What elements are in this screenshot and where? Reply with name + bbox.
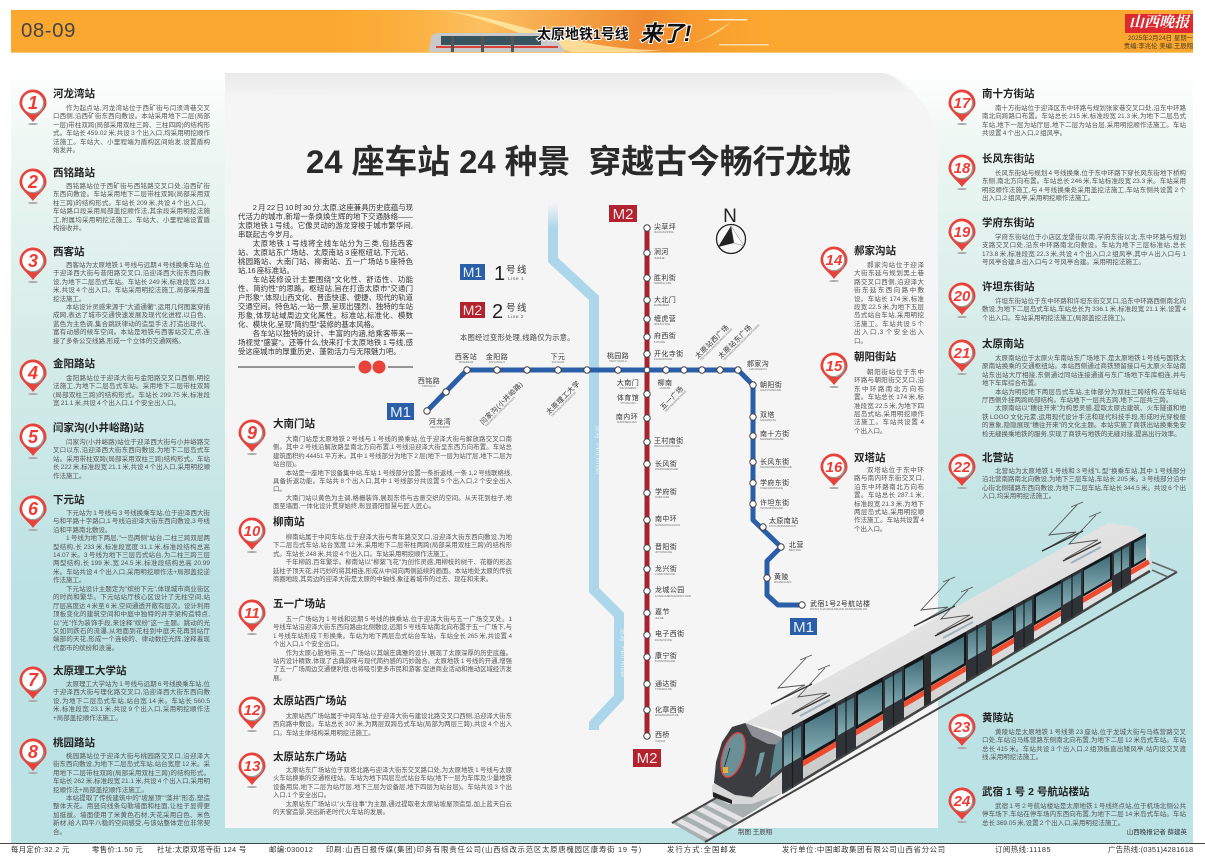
station name: 西铭路站 — [53, 167, 95, 179]
icon: pin 12: 12 — [244, 702, 261, 719]
train cab — [712, 723, 782, 804]
station text: 太原理工大学站为 1 号线与远期 6 号线换乘车站,位于迎泽西大街与理化路交叉口,沿迎泽西大街东西向敷设,为地下二层岛式车站,站台宽 14 米。车站长 560.5 米,标准段宽 23.1 米,共设 9 个出入口,采用明挖顺作法+局部盖挖顺作法施工。 — [53, 681, 210, 722]
line 1 station labels: 南十方街 — [760, 429, 790, 438]
station name: 柳南站 — [273, 516, 304, 528]
line 1 station labels: 武宿1号2号航站楼 — [810, 599, 870, 608]
icon: pin 21: 21 — [953, 345, 970, 362]
line 2 station labels: KAIHUASIJIE — [654, 357, 672, 361]
station text: 1 号线为地下两层,"一岛两侧"站台,二柱三跨双层两型结构,长 233 米,标准段宽度 31.1 米,标准段结构总高 14.07 米。3 号线为地下三层岛式站台,为二柱三跨三层两型结构,长 199 米,宽 24.5 米,标准段结构总高 20.99 米。车站共设 4 个出入口,采用明挖顺作法+局部盖挖逆作法施工。 — [53, 535, 210, 584]
icon: pin 3 — [20, 248, 46, 283]
map legend: 2 — [492, 301, 503, 323]
map legend — [460, 263, 528, 323]
icon: north compass: N — [723, 206, 737, 227]
line 2 station labels: 王村南街 — [654, 436, 684, 445]
station text: 本站为明挖地下两层岛式车站,主体部分为双柱三跨结构,在车站站厅西侧外挂两跨局部结构。车站地下一层共五跨,地下二层共三跨。 — [982, 388, 1186, 404]
station 24 — [948, 786, 1186, 828]
icon: pin 13: 13 — [244, 758, 261, 775]
station name: 朝阳街站 — [854, 351, 896, 363]
icon: pin 21 — [948, 339, 976, 376]
line 1 station labels: HUANGLING — [774, 580, 792, 584]
line 1 station labels: 下元 — [551, 353, 565, 361]
station text: 柳南站属于中间车站,位于迎泽大街与青年路交叉口,沿迎泽大街东西向敷设,为地下二层岛式车站,站台宽度 12 米,采用地下二层带柱两跨(局部采用双柱三跨)的结构形式。车站长 248 米,共设 4 个出入口。车站采用明挖顺作法施工。 — [273, 534, 512, 558]
line 1 station labels: 河龙湾 — [429, 417, 451, 426]
line 2 station labels: LONGCHENGGONGYUAN — [655, 594, 691, 598]
icon: pin 15: 15 — [826, 358, 843, 375]
line 1 station labels: HELONGWAN — [430, 425, 450, 429]
station text: 千年柳韵,百年繁华。柳南站以"柳絮飞花"为创作灵感,用柳枝的树干、花瓣的形态延柱子顶天花,并巧妙的将其相连,形成从中间向两侧延续的画面。本站地处太原的传统商圈地段,其旁边的迎泽大街是太原的中轴线,象征着城市的过去、现在和未来。 — [273, 559, 512, 583]
rotated station labels — [478, 323, 761, 428]
station name: 太原站西广场站 — [273, 695, 346, 707]
line 2 station labels: CHANGFENGJIE — [655, 467, 678, 471]
banner slogan — [537, 21, 691, 46]
icon: pin 7 — [20, 666, 46, 702]
line badges — [387, 205, 817, 767]
line 1 station labels: BEIYING — [789, 548, 801, 552]
line 2 station labels: JINYANGJIE — [655, 550, 672, 554]
line 2 station labels: 通达街 — [655, 679, 677, 688]
line 2 station labels: 化章西街 — [655, 705, 685, 714]
icon: pin 20: 20 — [953, 288, 971, 305]
icon: pin 6: 6 — [28, 499, 39, 519]
station name: 太原站东广场站 — [273, 751, 346, 763]
map legend: 号线 — [506, 264, 528, 276]
line 1 station labels: SHUANGTA — [760, 418, 776, 422]
line 1 station labels: 学府东街 — [760, 478, 790, 487]
station text: 学府东街站位于小店区龙堡街以南,学府东街以北,东中环路与规划支路交叉口处,沿东中环路南北向敷设。车站为地下三层标准站,总长 173.8 米,标准段宽 22.3 米,共设 4 个出入口,2 组风亭,其中 A 出入口与 1 号风亭合建,B 出入口与 2 号风亭合建。采用明挖法施工。 — [982, 234, 1186, 266]
icon: pin 11: 11 — [244, 605, 260, 622]
station text: 大南门站以黄色为主调,格栅装饰,展现东伟与古意交织的空间。从天花到柱子,地面至墙面,一体化设计贯穿始终,彰显晋阳智慧与匠人匠心。 — [273, 495, 512, 510]
station 10 — [238, 516, 512, 583]
rotated station labels: TAIYUANZHANXIGUANGCHANG — [699, 327, 733, 362]
station text — [273, 436, 512, 510]
map legend: 号线 — [506, 302, 528, 314]
line 2 station labels: 大北门 — [654, 295, 676, 304]
icon: pin 7: 7 — [28, 670, 39, 690]
divider with two red dots — [238, 360, 413, 374]
line 2 station labels: TIYUGUAN — [620, 401, 636, 405]
pantographs — [771, 502, 1101, 716]
station name: 太原理工大学站 — [53, 665, 126, 677]
page number: 08-09 — [21, 19, 76, 42]
station name: 学府东街站 — [982, 217, 1034, 229]
line badges: M2 — [613, 206, 633, 223]
rotated station labels: 五一广场 — [658, 384, 685, 411]
line badges: M2 — [637, 750, 657, 767]
line 2 station labels: 龙城公园 — [655, 585, 685, 594]
station 6 — [20, 494, 210, 652]
line 1 station labels: 西铭路 — [418, 376, 440, 385]
credit: reporter: 山西晚报记者 薛建英 — [1127, 829, 1187, 836]
line 2 station labels: DABEIMEN — [654, 303, 669, 307]
rotated station labels: TAIYUANLIGONGDAXUE — [550, 391, 577, 418]
station text: 大南门站是太原地铁 2 号线与 1 号线的换乘站,位于迎泽大街与解放路交叉口南侧。其中 2 号线沿解放路呈南北方向布置,1 号线沿迎泽大街呈东西方向布置。车站总建筑面积约 44451 平方米。其中 1 号线部分为地下 2 层(地下一层为站厅层,地下二层为站台层)。 — [273, 436, 512, 468]
icon: pin 5: 5 — [28, 427, 39, 447]
station name: 南十方街站 — [982, 88, 1034, 100]
line 2 stations — [644, 225, 650, 739]
station 21 — [948, 338, 1186, 439]
line 2 — [644, 228, 650, 736]
footer: 广告热线:(0351)4281618 — [1108, 845, 1193, 854]
station 1 — [20, 88, 210, 154]
icon: pin 12 — [238, 696, 266, 732]
footer: 订阅热线:11185 — [995, 845, 1051, 854]
line 1 station labels: NANSHIFANGJIE — [760, 437, 784, 441]
station 14 — [820, 245, 924, 346]
credit: chart: 制图 王辰翔 — [738, 829, 772, 836]
line 2 station labels: 康宁街 — [655, 651, 677, 660]
station name: 北营站 — [982, 452, 1014, 464]
line 1 station labels: 桃园路 — [607, 351, 629, 360]
line 2 station labels: 电子西街 — [655, 629, 685, 638]
line 1 station labels — [418, 351, 870, 611]
rotated station labels: WUYIGUANGCHANG — [664, 389, 687, 413]
line 2 station labels: 学府街 — [655, 487, 677, 496]
line 2 station labels: 涧河 — [654, 248, 669, 256]
rotated station labels: 闫家沟(小井峪路) — [478, 380, 525, 426]
icon: pin 14 — [820, 246, 848, 283]
line 2 station labels: 龙兴街 — [655, 564, 677, 573]
icon: pin 23: 23 — [953, 719, 971, 736]
banner slogan: 太原地铁1号线 — [537, 26, 629, 42]
line 2 station labels — [616, 222, 691, 743]
newspaper logo: 山西晚报 — [1129, 15, 1189, 31]
river: Fen River: 汾河 Fen River — [594, 425, 603, 475]
icon: pin 9: 9 — [247, 423, 257, 443]
icon: pin 15 — [820, 352, 848, 389]
icon: pin 23 — [948, 713, 976, 750]
station 5 — [20, 422, 210, 480]
station text: 黄陵站是太原地铁 1 号线第 23 座站,位于龙城大街与马练营路交叉口处,车站沿马练营路东侧南北向布置,为地下二层 12 米岛式车站。车站总长 415 米。车站共设 3 个出入口,2 组顶板直出矮风亭,站内设交叉渡线,采用明挖法施工。 — [982, 729, 1186, 761]
icon: pin 24 — [948, 787, 976, 824]
station text — [982, 355, 1186, 439]
station 15 — [820, 351, 924, 436]
station name: 河龙湾站 — [53, 88, 95, 100]
line 2 station labels: WANGCUNNANJIE — [654, 444, 680, 448]
footer: 印刷:山西日报传媒(集团)印务有限责任公司(山西综改示范区太原唐槐园区康寿街 19 号) — [326, 845, 642, 854]
rotated station labels: YANJIAGOU (XIAOJINGYULU) — [484, 396, 516, 428]
icon: pin 3: 3 — [28, 251, 38, 271]
header banner artwork — [380, 10, 769, 52]
station name: 大南门站 — [273, 418, 315, 430]
line 2 station labels: SHENGLIJIE — [654, 281, 671, 285]
station 2 — [20, 167, 210, 232]
line 2 station labels: 西桥 — [655, 730, 670, 739]
icon: pin 8: 8 — [28, 742, 38, 762]
station text: 朝阳街站位于东中环路与朝阳街交叉口,沿东中环路南北方向布置。车站总长 174 米,标准段宽 22.5 米,为地下四层岛式站,采用明挖顺作法施工。车站共设置 4 个出入口。 — [854, 369, 924, 435]
line 2 station labels: 长风街 — [655, 459, 677, 468]
station text: 五一广场站为 1 号线和远期 5 号线的换乘站,位于迎泽大街与五一广场交叉处。1 号线车站沿迎泽大街东西向路由北侧敷设,远期 5 号线车站南北向布置于五一广场下,与 1 号线车站形成 T 形换乘。车站为地下两层岛式站台车站。车站全长 265 米,共设置 4 个出入口,1 个安全出口。 — [273, 616, 512, 648]
station text — [273, 534, 512, 583]
line 2 station labels: 胜利街 — [654, 273, 676, 282]
station name: 长风东街站 — [982, 153, 1034, 165]
header band — [11, 10, 1193, 53]
line 2 station labels: 南内环 — [616, 412, 638, 421]
icon: pin 22 — [948, 453, 976, 490]
station text: 作为起点站,河龙湾站位于西矿街与闫须湾巷交叉口西侧,沿西矿街东西向敷设。本站采用地下二层(局部一层)带柱双跨(局部采用双柱三跨、三柱四跨)的结构形式。车站长 459.02 米,共设 3 个出入口,均采用明挖顺作法施工。车站大、小里程端为盾构区间始发,设置盾构始发井。 — [53, 105, 210, 154]
icon: pin 9 — [238, 420, 266, 455]
station 16 — [820, 452, 924, 534]
line 1 station labels: TAIYUANNANZHAN — [769, 524, 796, 528]
map legend: M2 — [463, 302, 482, 318]
line 2 station labels: HUAZHANGXIJIE — [655, 713, 679, 717]
icon: pin 8 — [20, 738, 46, 774]
map note: 本图经过变形处理,线路仅为示意。 — [460, 333, 575, 342]
line 1 station labels: 太原南站 — [769, 516, 799, 525]
line 1 station labels: 许坦东街 — [760, 498, 790, 507]
station text: 西铭路站位于西矿街与西铭路交叉口处,沿西矿街东西向敷设。车站采用地下二层带柱双跨(局部采用双柱三跨)的结构形式。车站长 209 米,共设 4 个出入口。车站路口段采用局部盖挖顺作法,其余段采用明挖法施工,附属均采用明挖法施工。车站大、小里程端设置盾构接收井。 — [53, 183, 210, 232]
station text: 北营站为太原地铁 1 号线和 3 号线"L 型"换乘车站,其中 1 号线部分沿北营南路南北向敷设,为地下三层车站,车站长 205 米。3 号线部分沿中心街北侧辅路东西向敷设,为地下二层车站,车站长 344.5 米。共设 6 个出入口,均采用明挖法施工。 — [982, 468, 1186, 500]
station 11 — [238, 598, 512, 682]
station text: 闫家沟(小井峪路)站位于迎泽西大街与小井峪路交叉口以东,沿迎泽西大街东西向敷设,为地下二层岛式车站。采用带柱双跨(局部采用双柱三跨)结构形式。车站长 222 米,标准段宽 21.1 米,共设 4 个出入口,采用明挖顺作法施工。 — [53, 439, 210, 480]
map legend: 1 — [494, 263, 505, 285]
map legend: Line 2 — [508, 314, 524, 320]
line 2 station labels: DIANZIXIJIE — [655, 638, 672, 642]
line 2 station labels: KANGNINGJIE — [655, 659, 675, 663]
station name: 五一广场站 — [273, 598, 326, 610]
station 20 — [948, 281, 1186, 323]
station text: 太原站东广场站以"火车往事"为主题,通过提取老太原站坡屋顶造型,加上蓝天白云的天窗造景,突出新老时代火车站的发展。 — [273, 800, 512, 816]
line 1 station labels: CHANGFENGDONGJIE — [760, 465, 792, 469]
station name: 太原南站 — [982, 338, 1024, 350]
line 2 station labels: LONGXINGJIE — [655, 572, 675, 576]
intro text: 太原地铁 1 号线将全线车站分为三类,包括西客站、太原站东广场站、太原南站 3 座枢纽站,下元站、桃园路站、大南门站、柳南站、五一广场站 5 座特色站,16 座标准站。 — [238, 239, 413, 275]
station 4 — [20, 358, 210, 407]
station 3 — [20, 246, 210, 345]
station text: 太原站东广场站位于双塔北路与迎泽大街东交叉路口处,为太原地铁 1 号线与太原火车站换乘的交通枢纽站。车站为地下四层岛式站台车站(地下一层为车库及少量地铁设备用房,地下二层为站厅层,地下三层为设备层,地下四层为站台层)。车站共设 3 个出入口,1 个安全出口。 — [273, 767, 512, 799]
rotated station labels: 太原站西广场 — [693, 323, 731, 360]
line 1 station labels: XIMINGLU — [422, 384, 436, 388]
line 1 station labels: XIAYUAN — [552, 360, 564, 364]
station text — [273, 767, 512, 817]
line 2 station labels: 尖草坪 — [654, 222, 676, 231]
icon: pin 6 — [20, 496, 46, 531]
line 2 station labels: FUXIJIE — [654, 340, 665, 344]
station text — [53, 262, 210, 345]
station name: 郝家沟站 — [854, 245, 896, 257]
line 2 station labels: JIANHE — [654, 256, 665, 260]
station text: 本站提取了传统建筑中的"坡屋顶""藻井"形态,塑造整体天花。用竖向线条勾勒墙面和柱面,让柱子显得更加挺拔。墙面使用了米黄色石材,天花采用白色、米色新材,给人四平八稳的空间感受,与该站整体定位非常契合。 — [53, 795, 210, 836]
station 9 — [238, 418, 512, 510]
line 2 station labels: XUEFUJIE — [655, 495, 669, 499]
footer: 社址:太原双塔寺街 124 号 — [157, 845, 247, 854]
station text: 太原南站位于太原火车南站东广场地下,是太原地铁 1 号线与国铁太原南站换乘的交通枢纽站。本站西侧通过商铁预留接口与太原火车站南站东出站大厅相接,东侧通过同站连接通道与东广场地下车库相连,并与地下车库综合布置。 — [982, 355, 1186, 387]
line 2 station labels: 府西街 — [654, 331, 676, 340]
station name: 许坦东街站 — [982, 281, 1034, 293]
station text: 太原站西广场站属于中间车站,位于迎泽大街与建设北路交叉口西侧,沿迎泽大街东西向路中敷设。车站总长 307 米,为两层双跨岛式车站(局部为两层三跨),共设 4 个出入口。车站主体结构采用明挖法施工。 — [273, 713, 512, 737]
station text: 长风东街站与规划 4 号线换乘,位于东中环路下穿长风东街地下桥构东侧,南北方向布置。车站总长 246 米,车站标准段宽 23.3 米。车站采用明挖顺作法施工,与 4 号线换乘处采用盖挖法施工,车站东侧共设置 2 个出入口,2 组风亭,采用明挖顺作法施工。 — [982, 170, 1186, 202]
station 7 — [20, 665, 210, 722]
line 2 station labels: 体育馆 — [617, 393, 639, 402]
station name: 桃园路站 — [53, 737, 95, 749]
station 23 — [948, 712, 1186, 762]
icon: pin 13 — [238, 752, 266, 789]
footer: 发行方式:全国邮发 — [667, 845, 737, 854]
icon: pin 16 — [820, 453, 848, 490]
station text: 下元站设计主题定为"缤纷下元",体现城市商业街区的时尚和繁华。下元站站厅核心区设计了无柱空间,站厅层高度达 4 米至 6 米,空间通透开敞有层次。设计利用顶板变化的建筑空间和中庭中独特的井字梁构造特点,以"光"作为装饰手段,来诠释"缤纷"这一主题。跳动的光又如同跌石的流瀑,从地面到花柱到中庭天花再到站厅端部的天花,形成一个连续的、律动数控光阵,诠释着现代都市的缤纷和浪漫。 — [53, 586, 210, 652]
line 1 station labels: LIUNAN — [660, 386, 670, 390]
line 1 station labels: 黄陵 — [774, 572, 789, 581]
line 1 station labels: TAOYUANLU — [609, 359, 627, 363]
river: Fen River: 汾河 Fen River — [619, 628, 628, 678]
icon: pin 24: 24 — [953, 793, 971, 810]
station name: 闫家沟(小井峪路)站 — [53, 422, 144, 434]
icon: pin 18 — [948, 154, 976, 191]
icon: north compass — [716, 206, 746, 254]
map legend: Line 1 — [508, 276, 524, 282]
line 1 station labels: 郝家沟 — [747, 359, 769, 368]
footer — [0, 843, 1205, 858]
line 1 station labels: HAOJIAGOU — [749, 367, 767, 371]
icon: pin 4: 4 — [27, 363, 38, 383]
line 1 station labels: DANANMEN — [620, 386, 636, 390]
line 1 station labels: WUSU 1HAOZHANZHAN HANGZHANLOU — [810, 607, 867, 611]
station text: 郝家沟站位于迎泽大街东延与规划黑土巷路交叉口西侧,沿迎泽大街东延东西向路中敷设。车站长 174 米,标准段宽 22.5 米,为地下五层岛式站台车站,采用明挖法施工。车站共设 5 个出入口,3 个安全出入口。 — [854, 262, 924, 345]
line 1 station labels: XUEFUDONGJIE — [760, 486, 783, 490]
icon: pin 14: 14 — [826, 252, 843, 269]
intro text: 车站装修设计主要围绕"文化性、舒适性、功能性、简约性"的思路。枢纽站,旨在打造太原市"交通门户形象",体现山西文化、晋造快速、便捷、现代的轨道交通空间。特色站,一站一景,呈现出强烈、独特的车站形象,体现站域周边文化属性。标准站,标准化、模数化、模块化,呈现"简约型"装修的基本风格。 — [238, 275, 413, 329]
icon: pin 20 — [948, 282, 976, 319]
line badges: M1 — [793, 619, 814, 636]
rotated station labels: TAIYUANZHANDONGGUANGCHANG — [722, 323, 761, 362]
station 19 — [948, 217, 1186, 268]
icon: pin 17 — [948, 89, 976, 126]
icon: pin 2: 2 — [27, 172, 38, 192]
line 1 station labels: 西客站 — [455, 352, 477, 361]
station 8 — [20, 737, 210, 836]
line 1 station labels: 金阳路 — [486, 352, 508, 361]
line 2 station labels: NANZHONGHUAN — [655, 523, 680, 527]
station 12 — [238, 695, 512, 737]
track — [672, 562, 1177, 842]
icon: pin 17: 17 — [954, 95, 971, 112]
station text: 金阳路站位于迎泽大街与金阳路交叉口西侧,明挖法施工,为地下二层岛式车站。采用地下二层带柱双跨(局部双柱三跨)的结构形式。车站长 299.75 米,标准段宽 21.1 米,共设 4 个出入口,1 个安全出入口。 — [53, 375, 210, 407]
line 1 station labels: 柳南 — [658, 378, 672, 387]
station text: 本站是一座地下设备集中站,车站 1 号线部分设置一条折返线,一条 1,2 号线联络线,具备折返功能。车站共 8 个出入口,其中 1 号线部分共设置 5 个出入口,2 个安全出入口。 — [273, 470, 512, 493]
station 18 — [948, 153, 1186, 204]
station text: 下元站为 1 号线与 3 号线换乘车站,位于迎泽西大街与和平路十字路口,1 号线沿迎泽大街东西向敷设,3 号线沿和平路南北敷设。 — [53, 510, 210, 534]
doors — [782, 541, 1131, 792]
station name: 双塔站 — [854, 452, 886, 464]
rotated station labels: 太原站东广场 — [716, 323, 754, 360]
station text: 本站设计灵感来源于"大道通衢",运用几何图案穿插成网,表达了城市交通快速发展及现代化进程,以白色、蓝色为主色调,集合跳跃律动的造型手法,打造出现代、富有动感的候车空间。本站是地铁与西客站交汇点,连接了多条公交线路,形成一个立体的交通网络。 — [53, 304, 210, 345]
icon: pin 16: 16 — [826, 459, 843, 476]
station text: 南十方街站位于迎泽区东中环路与规划张家巷交叉口处,沿东中环路南北向跨路口布置。车站总长 215 米,标准段宽 21.3 米,为地下二层岛式车站,地下一层为站厅层,地下二层为站台层,采用明挖顺作法施工。车站共设置 4 个出入口,2 组风亭。 — [982, 105, 1186, 137]
line 1 station labels: 北营 — [789, 540, 804, 549]
intro text: 2 月 22 日 10 时 30 分,太原,这座兼具历史底蕴与现代活力的城市,新增一条焕焕生辉的地下交通脉络——太原地铁 1 号线。它像灵动的游龙穿梭于城市繁华间,串联起古今岁月。 — [238, 203, 413, 239]
river: Fen River — [553, 203, 628, 730]
line 2 station labels: 晋阳街 — [655, 542, 677, 551]
banner slogan: 来了! — [640, 21, 691, 46]
line 2 station labels: 南中环 — [655, 514, 677, 523]
footer: 每月定价:32.2 元 — [11, 845, 70, 854]
station text: 武宿 1 号 2 号航站楼站是太原地铁 1 号线终点站,位于机场北侧公共停车场下,车站在停车场内东西向布置,为地下二层 14 米岛式车站。车站总长 369.05 米,设置 2 个出入口,采用明挖法施工。 — [982, 803, 1186, 827]
line 2 station labels: TONGDAJIE — [655, 687, 672, 691]
station text: 双塔站位于东中环路与南内环东街交叉口,沿东中环路南北方向布置。车站总长 287.1 米,标准段宽 21.3 米,为地下两层岛式站,采用明挖顺作法施工。车站共设置 4 个出入口。 — [854, 467, 924, 533]
icon: pin 1 — [20, 90, 46, 125]
intro text: 各车站以独特的设计、丰富的内涵,给乘客带来一场视觉"盛宴"。还等什么,快来打卡太原地铁 1 号线,感受这座城市的厚重历史、蓬勃活力与无限魅力吧。 — [238, 329, 413, 356]
station 13 — [238, 751, 512, 817]
station name: 黄陵站 — [982, 712, 1014, 724]
icon: pin 10 — [238, 518, 266, 553]
icon: pin 5 — [20, 424, 46, 459]
rotated station labels: 太原理工大学 — [544, 379, 582, 416]
station text — [273, 616, 512, 682]
station 17 — [948, 88, 1186, 138]
icon: pin 2 — [20, 168, 46, 204]
station text: 作为太原心脏地带,五一广场站以其端庄典雅的设计,展现了太原深厚的历史底蕴。站内设计精致,体现了古典韵味与现代简约感的巧妙融合。太原地铁 1 号线的开通,增强了五一广场周边交通便利性,也将吸引更多市民和游客,促进商业活动和推动区域经济发展。 — [273, 650, 512, 682]
line 1 station labels: 长风东街 — [760, 457, 790, 466]
station name: 西客站 — [53, 246, 84, 258]
train roof — [745, 523, 1143, 732]
line 1 station labels: CHAOYANGJIE — [760, 388, 781, 392]
line 1 — [427, 370, 802, 605]
date and editors: 2025年2月24日 星期一 — [1128, 35, 1193, 42]
station text: 桃园路站位于迎泽大街与桃园路交叉口,沿迎泽大街东西向敷设,为地下二层岛式车站,站台宽度 12 米。采用地下二层带柱双跨(局部采用双柱三跨)的结构形式。车站长 262 米,标准段宽 21.1 米,共设 4 个出入口,采用明挖顺作法+局部盖挖顺作法施工。 — [53, 753, 210, 794]
icon: pin 19: 19 — [954, 224, 971, 241]
line 1 station labels: 双塔 — [760, 410, 775, 419]
line 1 station labels: XIKEZHAN — [459, 360, 473, 364]
small train — [429, 33, 566, 52]
line 2 station labels: 缠虎营 — [654, 314, 676, 323]
station name: 金阳路站 — [53, 358, 95, 370]
line 1 stations — [424, 367, 805, 608]
icon: pin 19 — [948, 218, 976, 255]
icon: pin 1: 1 — [28, 93, 38, 113]
station text: 许坦东街站位于东中环路和许坦东街交叉口,沿东中环路西侧南北向敷设,为地下二层岛式车站,车站总长为 336.1 米,标准段宽 21.1 米,设置 4 个出入口。车站采用明挖法施工(局部盖挖法施工)。 — [982, 298, 1186, 322]
station name: 下元站 — [53, 494, 84, 506]
line 2 station labels: XIQIAO — [655, 739, 666, 743]
footer: 零售价:1.50 元 — [92, 845, 143, 854]
station text — [53, 752, 210, 836]
line 2 station labels: NANNEIHUAN — [617, 420, 637, 424]
line 1 station labels: 大南门 — [617, 378, 639, 387]
station 22 — [948, 452, 1186, 502]
icon: pin 10: 10 — [244, 523, 261, 540]
station text — [53, 510, 210, 652]
line 1 station labels: XUTANDONGJIE — [760, 506, 783, 510]
main title: 24 座车站 24 种景 穿越古今畅行龙城 — [306, 143, 851, 180]
date and editors: 责编:李兆伦 美编:王辰翔 — [1124, 43, 1193, 50]
line 1 station labels: JINYANGLU — [489, 360, 505, 364]
date and editors — [1124, 34, 1193, 50]
line badges: M1 — [390, 404, 411, 421]
icon: pin 22: 22 — [953, 459, 971, 476]
train side — [782, 533, 1150, 793]
footer: 邮编:030012 — [269, 845, 313, 854]
station text: 太原南站以"穗往开来"为构思灵感,提取太原古建筑、火车隧道和地铁 LOGO 文化元素,运用现代设计手法和现代科技手段,形成时光穿梭般的意象,隐隐展现"穗往开来"的文化主题。本站实施了商铁出站换乘免安检无缝换乘地铁的服务,实现了商铁与地铁的无缝对接,提高出行效率。 — [982, 405, 1186, 438]
line 2 station labels: 嘉节 — [655, 607, 670, 616]
line 2 station labels: 开化寺街 — [654, 349, 684, 358]
line 2 station labels: JIANCAOPING — [654, 230, 674, 234]
station name: 武宿 1 号 2 号航站楼站 — [982, 786, 1089, 798]
windows — [805, 536, 1146, 756]
line 2 station labels: JIAJIE — [655, 616, 664, 620]
footer: 发行单位:中国邮政集团有限公司山西省分公司 — [782, 845, 946, 854]
icon: pin 4 — [20, 360, 46, 395]
map legend: M1 — [463, 264, 482, 280]
intro text — [238, 203, 414, 356]
icon: pin 11 — [238, 600, 266, 635]
icon: pin 18: 18 — [954, 160, 971, 177]
station text: 西客站为太原地铁 1 号线与远期 4 号线换乘车站,位于迎泽西大街与昔阳路交叉口,沿迎泽西大街东西向敷设,为地下二层岛式车站。车站长 249 米,标准段宽 23.1 米,共设 4 个出入口。车站采用明挖法施工,局部采用盖挖法施工。 — [53, 262, 210, 302]
line 2 station labels: JINHUYING — [654, 322, 670, 326]
line 1 station labels: 朝阳街 — [760, 380, 782, 389]
